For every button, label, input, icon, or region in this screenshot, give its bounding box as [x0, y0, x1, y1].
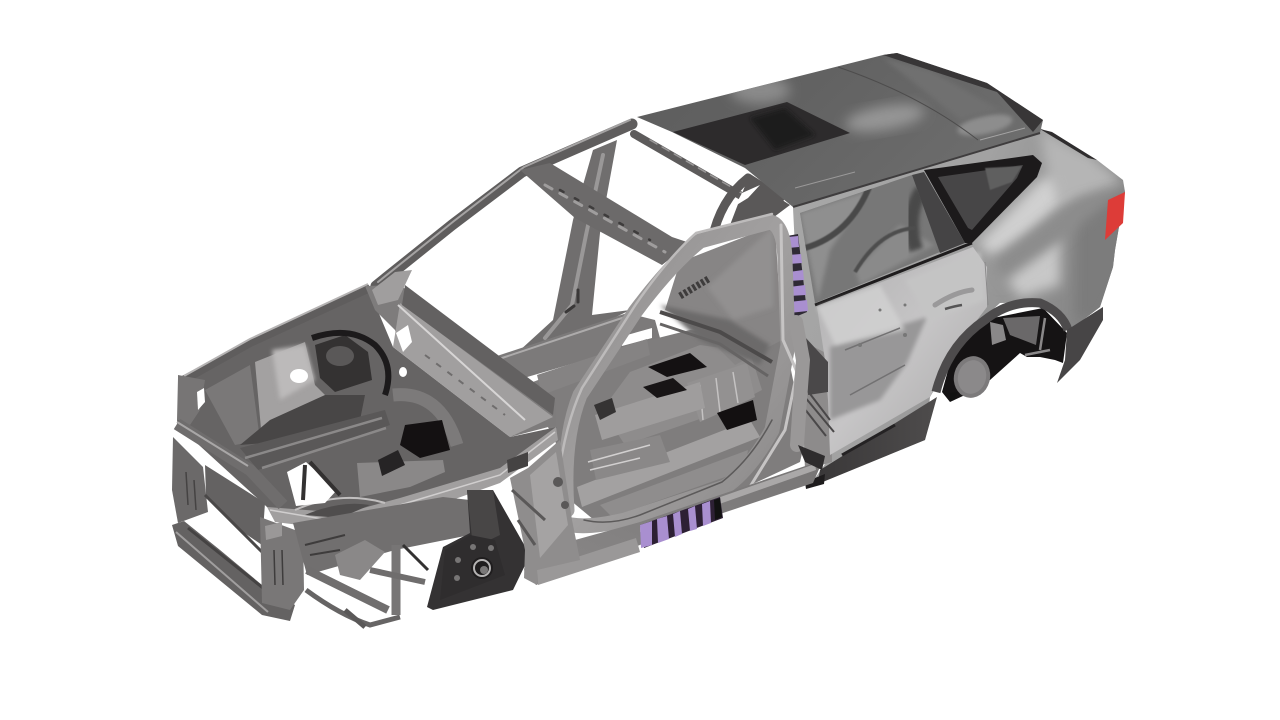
cowl panel [365, 285, 556, 437]
near door ring [558, 214, 803, 526]
far side greenhouse frame [376, 120, 790, 385]
door handle [935, 290, 972, 305]
rear body side [793, 128, 1130, 489]
body highlights [978, 128, 1130, 320]
bay floor [177, 285, 557, 527]
front crash structure [172, 437, 470, 627]
dark inner pocket [805, 337, 828, 395]
rear lower bumper [1057, 307, 1103, 383]
bumper bar [172, 521, 295, 621]
near upper rail [267, 427, 558, 530]
roof crease [795, 172, 855, 188]
rear roof trim [1040, 129, 1097, 160]
lower rear door dark panel [808, 397, 937, 488]
A pillar base [372, 270, 412, 305]
top front cross [177, 424, 283, 505]
far fender rail [184, 288, 370, 380]
upper inner panel behind B pillar [665, 225, 782, 365]
mid subframe [293, 497, 470, 575]
sunroof glass [673, 102, 850, 165]
quarter panel [793, 128, 1125, 488]
rails [240, 410, 390, 470]
floor cross bars [595, 382, 705, 440]
roof panel [637, 53, 1043, 207]
far sill [485, 313, 660, 385]
front hub carrier [427, 490, 530, 610]
firewall lower section [510, 440, 580, 585]
far vertical post [172, 437, 208, 523]
dark floor openings [648, 353, 707, 377]
near vertical post [260, 517, 304, 610]
rear door window [800, 175, 940, 303]
rear door lower panel [817, 247, 987, 455]
wheel hub [949, 352, 995, 402]
far wheelhouse [393, 395, 457, 445]
far B pillar [518, 140, 630, 352]
ribbed tank [687, 363, 755, 422]
sill ribs [804, 386, 834, 436]
pillar between windows [912, 172, 965, 253]
loop in the rail [295, 498, 385, 510]
roof seam [838, 67, 978, 140]
rear roof bow [634, 134, 757, 205]
roof cross member [520, 163, 690, 265]
engine bay [177, 270, 558, 530]
wheel well [942, 308, 1067, 402]
B pillar outer [796, 322, 803, 445]
purple sill reinforcement [640, 497, 723, 548]
door shut line [985, 262, 988, 305]
roof spoiler [883, 53, 1043, 132]
under rail gaps [287, 462, 340, 506]
strut tower [205, 365, 260, 445]
wheel arch lip [936, 303, 1068, 392]
door shell backing [800, 340, 832, 470]
window seam [815, 243, 972, 305]
lower members [306, 590, 400, 625]
purple B-pillar reinforcement [787, 234, 808, 320]
floor pan and tunnel [525, 225, 805, 525]
rear quarter window [924, 155, 1042, 243]
master cylinder block [315, 335, 372, 392]
far A pillar and roof rail [376, 124, 632, 286]
taillight [1105, 192, 1125, 240]
rocker sill [524, 445, 825, 585]
rear door arch behind [712, 178, 780, 240]
illustration: car body in white [172, 53, 1125, 629]
